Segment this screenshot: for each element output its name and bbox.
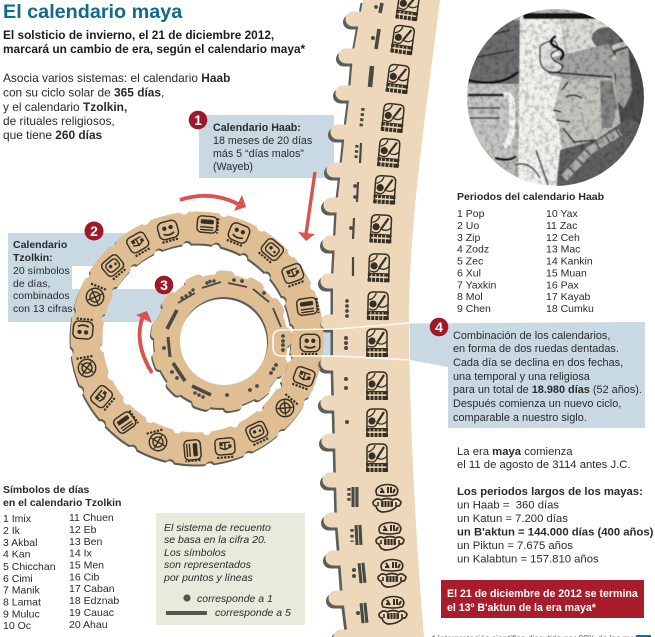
list: Tzolkin day symbols: 15 Men bbox=[69, 560, 104, 572]
highlight: gear mesh outline bbox=[273, 323, 410, 360]
subheading bbox=[3, 28, 306, 56]
intro text: y el calendario Tzolkin, bbox=[3, 100, 127, 114]
list: Haab periods: 14 Kankin bbox=[546, 256, 593, 268]
panel: calendario Haab: más 5 “días malos” bbox=[213, 148, 304, 160]
panel: counting system: por puntos y líneas bbox=[163, 572, 253, 584]
list: Tzolkin day symbols: 16 Cib bbox=[69, 572, 100, 584]
subheading: marcará un cambio de era, según el calendario maya* bbox=[3, 42, 306, 56]
list: Tzolkin day symbols: 1 Imix bbox=[3, 513, 32, 525]
wheel day glyphs bbox=[72, 215, 320, 461]
text: long periods: Los periodos largos de los mayas: bbox=[457, 486, 643, 498]
list: Tzolkin day symbols: 6 Cimi bbox=[3, 573, 33, 585]
callout: end of 13th B'aktun: el 13º B'aktun de la era maya* bbox=[447, 602, 597, 614]
list: Haab periods: 1 Pop bbox=[457, 208, 485, 220]
list: Tzolkin day symbols: 4 Kan bbox=[3, 548, 31, 560]
badge 2: 2 bbox=[90, 223, 98, 239]
panel: counting system: El sistema de recuento bbox=[164, 522, 271, 534]
list: Tzolkin day symbols: 9 Muluc bbox=[3, 608, 40, 620]
intro text: con su ciclo solar de 365 días, bbox=[3, 86, 164, 100]
legend: bar bbox=[166, 607, 291, 619]
list: Tzolkin day symbols: 17 Caban bbox=[69, 583, 115, 595]
intro text: de rituales religiosos, bbox=[3, 114, 115, 128]
list: Haab periods: 8 Mol bbox=[457, 291, 483, 303]
list: Haab periods: Periodos del calendario Haab bbox=[457, 191, 604, 203]
text: start of the Maya era bbox=[457, 446, 631, 471]
text: long periods: un B'aktun = 144.000 días (400 años) bbox=[457, 526, 654, 538]
panel: calendario Haab: 18 meses de 20 días bbox=[213, 135, 312, 147]
list: Haab periods: 11 Zac bbox=[546, 220, 577, 232]
legend: dot: corresponde a 1 bbox=[197, 593, 273, 605]
arrow: outer wheel rotation bbox=[180, 195, 246, 211]
text: long periods bbox=[457, 486, 654, 566]
list: Tzolkin day symbols: 11 Chuen bbox=[69, 512, 114, 524]
list: Tzolkin day symbols: 5 Chicchan bbox=[3, 561, 56, 573]
list: Haab periods: 18 Cumku bbox=[546, 303, 594, 315]
panel: combination of calendars: en forma de dos ruedas dentadas. bbox=[453, 343, 619, 355]
list: Haab periods: 13 Mac bbox=[546, 244, 580, 256]
panel: counting system: Los símbolos bbox=[164, 547, 227, 559]
subheading: El solsticio de invierno, el 21 de diciembre 2012, bbox=[3, 28, 274, 42]
list: Haab periods: 12 Ceh bbox=[546, 232, 580, 244]
list: Haab periods: 9 Chen bbox=[457, 303, 491, 315]
badge 4 bbox=[430, 318, 448, 336]
text: long periods: un Haab = 360 días bbox=[457, 500, 559, 512]
text: long periods: un Piktun = 7.675 años bbox=[457, 540, 573, 552]
badge 4: 4 bbox=[435, 319, 443, 335]
panel: counting system: se basa en la cifra 20. bbox=[164, 534, 267, 546]
panel: calendario Tzolkin: 20 símbolos bbox=[13, 265, 70, 277]
text: long periods: un Katun = 7.200 días bbox=[457, 513, 568, 525]
list: Haab periods: 10 Yax bbox=[546, 208, 578, 220]
list: Tzolkin day symbols: 7 Manik bbox=[3, 584, 41, 596]
callout: end of 13th B'aktun bbox=[441, 580, 644, 618]
blue link behind wheel bbox=[318, 331, 338, 356]
panel: calendario Tzolkin: Calendario bbox=[13, 239, 67, 251]
badge 3 bbox=[155, 276, 173, 294]
list: Haab periods: 4 Zodz bbox=[457, 244, 489, 256]
list: Tzolkin day symbols: 19 Cauac bbox=[69, 607, 114, 619]
intro text: que tiene 260 días bbox=[3, 128, 103, 142]
text: start of the Maya era: La era maya comienza bbox=[457, 446, 573, 458]
badge 3: 3 bbox=[160, 277, 168, 293]
list: Haab periods: 16 Pax bbox=[546, 280, 579, 292]
intro text bbox=[3, 71, 230, 142]
list: Tzolkin day symbols: 12 Eb bbox=[69, 524, 97, 536]
legend: bar: corresponde a 5 bbox=[215, 607, 291, 619]
badge 1: 1 bbox=[194, 112, 202, 128]
panel: calendario Tzolkin: Tzolkin: bbox=[13, 252, 53, 264]
list: Tzolkin day symbols: Símbolos de días bbox=[3, 484, 90, 496]
panel: calendario Haab: (Wayeb) bbox=[213, 161, 253, 173]
list: Haab periods: 6 Xul bbox=[457, 268, 481, 280]
calendar strip: Haab wheel segment bbox=[326, 0, 446, 637]
list: Haab periods bbox=[457, 191, 604, 315]
list: Tzolkin day symbols bbox=[3, 484, 121, 632]
list: Tzolkin day symbols: 10 Oc bbox=[3, 620, 31, 632]
photo: Maya stone relief bbox=[465, 8, 650, 190]
panel: calendario Tzolkin: combinados bbox=[13, 290, 70, 302]
text: long periods: un Kalabtun = 157.810 años bbox=[457, 554, 599, 566]
panel: combination of calendars: para un total de 18.980 días (52 años). bbox=[453, 384, 642, 396]
panel: calendario Haab: Calendario Haab: bbox=[213, 122, 301, 134]
arrow: inner wheel rotation bbox=[136, 311, 152, 373]
badge 2 bbox=[84, 222, 104, 240]
panel: combination of calendars: comparable a nuestro siglo. bbox=[453, 412, 587, 424]
list: Haab periods: 17 Kayab bbox=[546, 291, 591, 303]
intro text: Asocia varios sistemas: el calendario Haab bbox=[3, 71, 230, 85]
panel: counting system bbox=[156, 513, 305, 625]
list: Tzolkin day symbols: 13 Ben bbox=[69, 536, 102, 548]
panel: combination of calendars: una temporal y una religiosa bbox=[453, 371, 591, 383]
Haab inner wheel bbox=[150, 270, 292, 414]
Tzolkin outer wheel bbox=[70, 212, 324, 466]
panel: combination of calendars bbox=[410, 322, 645, 428]
list: Haab periods: 15 Muan bbox=[546, 268, 587, 280]
inner wheel numerals bbox=[162, 278, 285, 399]
panel: calendario Tzolkin bbox=[8, 233, 170, 322]
strip glyphs bbox=[366, 0, 421, 624]
arrow: calendar Haab pointer bbox=[298, 172, 315, 241]
list: Tzolkin day symbols: 14 Ix bbox=[69, 548, 93, 560]
badge 1 bbox=[189, 111, 207, 129]
list: Haab periods: 2 Uo bbox=[457, 220, 479, 232]
list: Tzolkin day symbols: 2 Ik bbox=[3, 525, 21, 537]
panel: combination of calendars: Después comienza un nuevo ciclo, bbox=[453, 398, 621, 410]
panel: calendario Tzolkin: de días, bbox=[13, 278, 50, 290]
list: Haab periods: 7 Yaxkin bbox=[457, 280, 496, 292]
list: Tzolkin day symbols: 18 Edznab bbox=[69, 595, 119, 607]
list: Haab periods: 5 Zec bbox=[457, 256, 483, 268]
panel: combination of calendars: Cada día se declina en dos fechas, bbox=[453, 357, 623, 369]
list: Tzolkin day symbols: en el calendario Tzolkin bbox=[3, 497, 121, 509]
title: El calendario maya bbox=[3, 1, 183, 23]
list: Haab periods: 3 Zip bbox=[457, 232, 481, 244]
list: Tzolkin day symbols: 3 Akbal bbox=[3, 537, 37, 549]
panel: calendario Tzolkin: con 13 cifras bbox=[13, 303, 73, 315]
list: Tzolkin day symbols: 8 Lamat bbox=[3, 596, 41, 608]
panel: counting system: son representados bbox=[164, 559, 252, 571]
callout: end of 13th B'aktun: El 21 de diciembre de 2012 se termina bbox=[447, 588, 638, 600]
list: Tzolkin day symbols: 20 Ahau bbox=[69, 619, 108, 631]
text: start of the Maya era: el 11 de agosto de 3114 antes J.C. bbox=[457, 459, 631, 471]
panel: combination of calendars: Combinación de los calendarios, bbox=[453, 330, 610, 342]
strip numerals bbox=[344, 3, 382, 623]
panel: calendario Haab bbox=[199, 115, 334, 178]
